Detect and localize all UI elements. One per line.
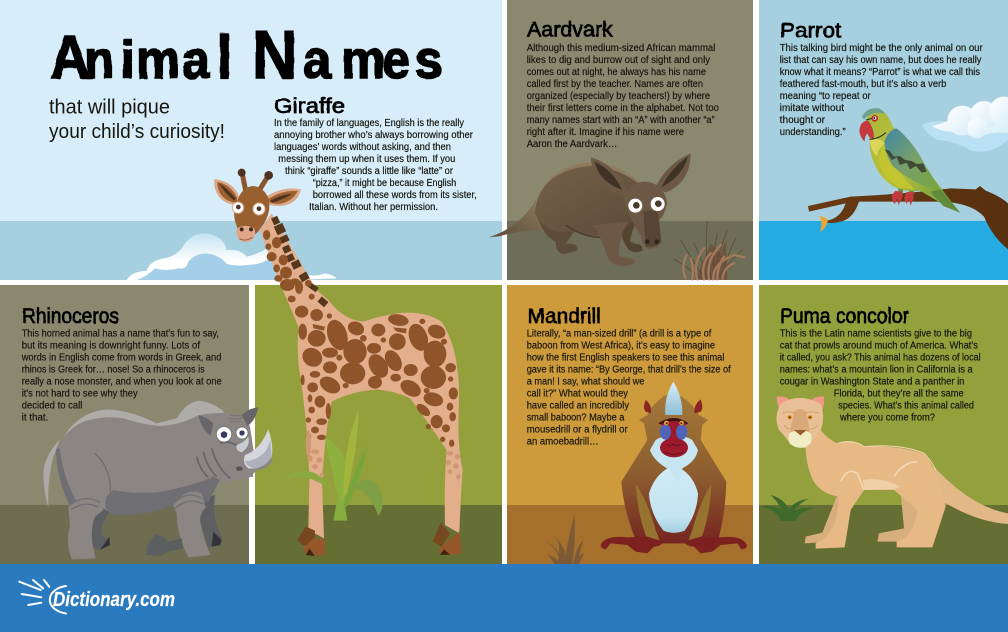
- aardvark tail: [489, 200, 542, 237]
- aardvark hind leg: [537, 217, 578, 254]
- body copy: aardvark: many names start with an “A” with another “a”: [527, 115, 715, 126]
- body copy: giraffe: “pizza,” it might be because English: [313, 178, 456, 189]
- parrot tail: [930, 189, 960, 213]
- body copy: aardvark: Although this medium-sized African mammal: [527, 43, 715, 54]
- body copy: parrot: thought or: [780, 115, 826, 126]
- body copy: parrot: [780, 43, 983, 138]
- mandrill ear tufts: [644, 399, 702, 413]
- rhino head: [200, 413, 273, 479]
- mandrill belly: [649, 468, 698, 533]
- mandrill face: [658, 418, 688, 457]
- body copy: puma concolor: it called, you ask? This animal has dozens of local: [780, 353, 981, 364]
- rhino eyes: [216, 427, 248, 442]
- body copy: rhinoceros: it's not hard to see why they: [22, 389, 138, 400]
- illustration: banana plant: [282, 411, 383, 521]
- subtitle: [49, 96, 225, 143]
- illustration: branch: [808, 186, 1008, 249]
- mandrill body fur: [621, 392, 726, 543]
- subtitle: your child’s curiosity!: [49, 120, 225, 143]
- body copy: aardvark: called first by the teacher. Names are often: [527, 79, 703, 90]
- giraffe spots: [263, 230, 458, 447]
- text block: parrot: [780, 20, 983, 138]
- parrot body: [866, 109, 960, 213]
- giraffe horns: [238, 169, 273, 191]
- rhino horns: [236, 429, 272, 469]
- giraffe hooves: [298, 523, 462, 556]
- body copy: mandrill: call it?” What would they: [527, 389, 628, 400]
- logo icon: sunburst: [19, 580, 66, 614]
- body copy: aardvark: right after it. Imagine if his name were: [527, 127, 684, 138]
- body copy: puma concolor: species. What’s this animal called: [838, 401, 974, 412]
- cloud near parrot: [922, 97, 1008, 152]
- stones: [147, 534, 183, 556]
- rhino toes: [100, 532, 222, 550]
- aardvark near front leg: [593, 222, 635, 266]
- panel: parrot background: [759, 0, 1008, 280]
- illustration: dry grass tuft: [674, 222, 745, 279]
- rhino body: [56, 413, 253, 514]
- body copy: puma concolor: This is the Latin name scientists give to the big: [780, 329, 972, 340]
- body copy: parrot: This talking bird might be the only animal on our: [780, 43, 983, 54]
- mandrill eyes: [664, 421, 684, 425]
- illustration: rhinoceros: [43, 401, 273, 559]
- body copy: mandrill: Literally, “a man-sized drill” (a drill is a type of: [527, 329, 712, 340]
- body copy: giraffe: borrowed all these words from its sister,: [313, 190, 477, 201]
- body copy: parrot: list that can say his own name, but does he really: [780, 55, 982, 66]
- body copy: rhinoceros: but its meaning is downright funny. Lots of: [22, 341, 200, 352]
- text block: aardvark: [527, 18, 719, 150]
- illustration: puma: [777, 397, 1008, 549]
- aardvark eyes: [628, 197, 665, 213]
- heading: giraffe: Giraffe: [274, 95, 345, 118]
- puma far legs: [805, 493, 922, 543]
- cloud puffs: [932, 97, 1008, 138]
- puma eyes: [787, 415, 812, 419]
- puma ears: [777, 397, 824, 413]
- body copy: mandrill: small baboon? Maybe a: [527, 413, 625, 424]
- rhino far legs: [85, 495, 222, 550]
- text block: puma concolor: [780, 305, 981, 424]
- cloud behind giraffe: [127, 233, 337, 280]
- body copy: mandrill: baboon from West Africa), it’s easy to imagine: [527, 341, 715, 352]
- giraffe lower leg spots: [306, 430, 461, 482]
- panel: aardvark background: [507, 0, 753, 280]
- body copy: puma concolor: cougar in Washington State and a panther in: [780, 377, 964, 388]
- mandrill crest: [665, 382, 682, 415]
- body copy: giraffe: [274, 118, 477, 213]
- aardvark ears: [591, 153, 691, 197]
- heading: parrot: Parrot: [780, 20, 841, 42]
- title: nima: [84, 29, 211, 89]
- panel: rhinoceros background: [0, 285, 249, 564]
- giraffe muzzle: [236, 226, 255, 242]
- heading: mandrill: Mandrill: [528, 305, 601, 328]
- parrot chest: [870, 139, 885, 157]
- puma body: [791, 425, 946, 549]
- body copy: aardvark: Aaron the Aardvark…: [527, 139, 617, 150]
- cloud shadow: [922, 121, 1008, 152]
- rhino underside: [105, 477, 220, 515]
- giraffe eyes: [232, 202, 265, 215]
- rhino tail: [43, 439, 60, 507]
- illustration: parrot: [859, 108, 960, 213]
- body copy: mandrill: mousedrill or a flydrill or: [527, 425, 628, 436]
- rhino back highlight: [63, 401, 224, 450]
- body copy: rhinoceros: This horned animal has a name that’s fun to say,: [22, 329, 219, 340]
- parrot feet: [892, 191, 913, 205]
- wing dark feathers: [885, 149, 927, 173]
- title: l: [217, 25, 232, 92]
- heading: rhinoceros: Rhinoceros: [22, 305, 119, 328]
- illustration: aardvark: [489, 153, 691, 266]
- giraffe body: [260, 213, 463, 538]
- body copy: mandrill: have called an incredibly: [527, 401, 629, 412]
- body copy: mandrill: gave it its name: “By George, that drill’s the size of: [527, 365, 731, 376]
- body copy: giraffe: messing them up when it uses them. If you: [278, 154, 455, 165]
- illustration: shrub near puma: [761, 495, 814, 521]
- body copy: aardvark: organized (especially by teachers!) by where: [527, 91, 710, 102]
- aardvark body: [535, 166, 647, 236]
- panel: title sky: [0, 0, 502, 280]
- body copy: rhinoceros: decided to call: [22, 401, 82, 412]
- logo wordmark: Dictionary.com: [53, 589, 175, 611]
- body copy: giraffe: think “giraffe” sounds a little like “latte” or: [285, 166, 454, 177]
- body copy: aardvark: [527, 43, 719, 150]
- puma shoulder shading: [837, 441, 936, 490]
- body copy: puma concolor: [780, 329, 981, 424]
- giraffe mane: [271, 216, 328, 307]
- title: [50, 17, 443, 93]
- parrot wing: [884, 128, 940, 192]
- logo: Dictionary.com: [19, 580, 175, 614]
- illustration: giraffe: [260, 213, 463, 556]
- body copy: parrot: know what it means? “Parrot” is what we call this: [780, 67, 980, 78]
- body copy: mandrill: [527, 329, 731, 448]
- puma head: [777, 398, 823, 445]
- body copy: mandrill: an amoebadrill…: [527, 437, 599, 448]
- body copy: parrot: imitate without: [780, 103, 844, 114]
- body copy: aardvark: likes to dig and burrow out of sight and only: [527, 55, 710, 66]
- grass tuft: [545, 515, 584, 564]
- puma muzzle: [789, 430, 812, 448]
- body copy: parrot: feathered fast-mouth, but it’s also a verb: [780, 79, 946, 90]
- body copy: mandrill: how the first English speakers to see this animal: [527, 353, 724, 364]
- rhino near legs: [68, 492, 211, 559]
- mandrill feet: [601, 537, 747, 553]
- heading: puma concolor: Puma concolor: [780, 305, 909, 328]
- body copy: rhinoceros: rhinos is Greek for… nose! So a rhinoceros is: [22, 365, 205, 376]
- body copy: puma concolor: cat that prowls around much of America. What’s: [780, 341, 978, 352]
- text block: mandrill: [527, 305, 731, 448]
- text block: rhinoceros: [21, 305, 222, 424]
- rhino ears: [198, 407, 258, 436]
- parrot eye: [866, 115, 878, 122]
- leaf: [819, 216, 828, 232]
- mandrill cheeks: [660, 424, 687, 440]
- mandrill beard: [650, 435, 698, 484]
- body copy: giraffe: Italian. Without her permission.: [309, 202, 438, 213]
- body copy: giraffe: languages’ words without asking, and then: [274, 142, 451, 153]
- aardvark head and snout: [624, 182, 667, 249]
- body copy: puma concolor: Florida, but they’re all the same: [834, 389, 964, 400]
- body copy: aardvark: comes out at night, he always has his name: [527, 67, 706, 78]
- body copy: puma concolor: names: what’s a mountain lion in California is a: [780, 365, 973, 376]
- body copy: puma concolor: where you come from?: [839, 413, 936, 424]
- body copy: rhinoceros: [21, 329, 222, 424]
- body copy: mandrill: a man! I say, what should we: [527, 377, 644, 388]
- panel: giraffe background: [255, 285, 502, 564]
- title: N: [252, 17, 297, 93]
- title: A: [50, 25, 90, 92]
- body copy: giraffe: annoying brother who’s always borrowing other: [274, 130, 474, 141]
- panel: puma background: [759, 285, 1008, 564]
- mandrill arm highlights: [636, 484, 711, 543]
- body copy: parrot: understanding.”: [780, 127, 846, 138]
- body copy: rhinoceros: really a nose monster, and when you look at one: [22, 377, 222, 388]
- parrot collar: [869, 133, 886, 139]
- subtitle: that will pique: [49, 96, 170, 118]
- illustration: giraffe head: [214, 169, 301, 242]
- title: ames: [303, 29, 443, 89]
- parrot beak: [859, 121, 874, 141]
- aardvark far front leg: [619, 217, 642, 252]
- giraffe ears: [214, 179, 301, 206]
- giraffe face: [234, 186, 269, 237]
- body copy: parrot: meaning “to repeat or: [780, 91, 871, 102]
- panel: mandrill background: [507, 285, 753, 564]
- aardvark back arch: [534, 162, 644, 208]
- body copy: aardvark: their first letters come in the alphabet. Not too: [527, 103, 719, 114]
- parrot head cap: [862, 108, 885, 119]
- body copy: rhinoceros: words in English come from words in Greek, and: [21, 353, 221, 364]
- body copy: giraffe: In the family of languages, English is the really: [274, 118, 464, 129]
- puma tail: [931, 467, 1008, 524]
- illustration: mandrill: [545, 382, 747, 564]
- footer band: [0, 564, 1008, 632]
- text block: giraffe: [274, 95, 477, 213]
- parrot legs: [898, 183, 915, 195]
- body copy: rhinoceros: it that.: [22, 413, 48, 424]
- heading: aardvark: Aardvark: [527, 18, 613, 42]
